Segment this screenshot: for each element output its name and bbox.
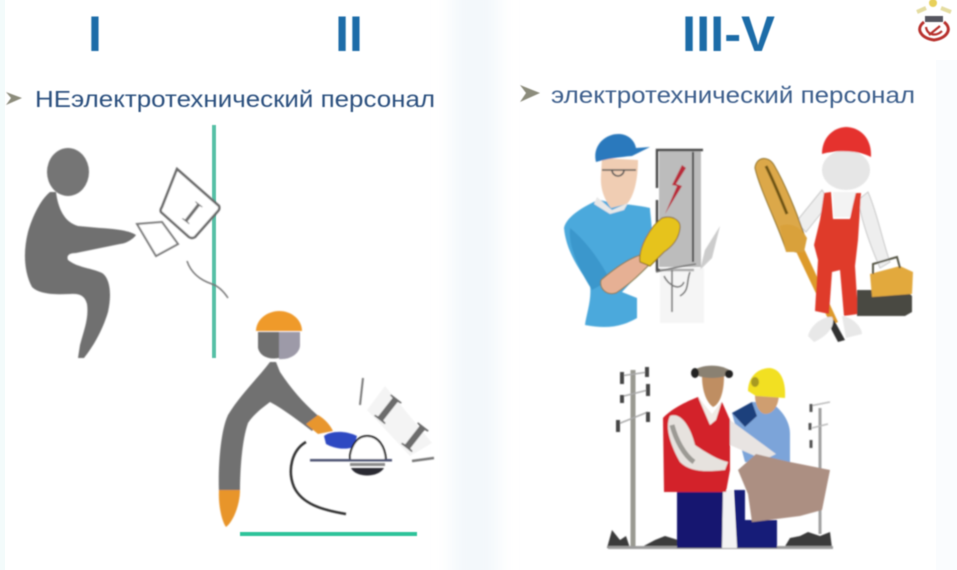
logo <box>917 0 951 40</box>
divider: vertical green line <box>212 125 216 358</box>
screwdriver shaft <box>793 240 838 325</box>
left power pole <box>618 367 648 548</box>
hand <box>780 224 807 252</box>
label: non-electrotechnical staff: НЕэлектротехнический персонал <box>35 86 435 112</box>
figure: seated person with group I card <box>25 148 228 358</box>
screwdriver handle <box>755 159 806 252</box>
body <box>219 362 322 492</box>
right power pole <box>810 402 830 534</box>
label: electrotechnical staff: электротехнический персонал <box>551 82 915 108</box>
heading: I: I <box>88 6 102 62</box>
right arm <box>730 420 776 460</box>
crack line <box>187 261 228 298</box>
heading: III-V: III-V <box>682 6 776 62</box>
cap <box>822 127 871 157</box>
cables <box>660 268 704 323</box>
white shirt arm <box>668 415 728 471</box>
heading: II: II <box>335 6 363 62</box>
figure: seated person with group I card: I <box>176 195 208 231</box>
device <box>350 436 386 460</box>
blueprint <box>738 454 830 522</box>
front worker face <box>702 376 724 407</box>
figure: worker with group II card <box>219 311 435 527</box>
paper card II <box>367 386 432 456</box>
electrical panel <box>659 151 701 267</box>
overalls <box>814 192 861 316</box>
back worker trousers <box>734 490 777 548</box>
illustration: 3D worker with screwdriver and toolbox <box>755 127 913 342</box>
paper sheet <box>137 222 178 256</box>
figure: worker with group II card: I <box>367 387 408 433</box>
back worker body <box>732 402 790 462</box>
toolbox <box>857 290 912 316</box>
shirt <box>833 192 856 217</box>
head <box>822 150 870 190</box>
forearm <box>601 254 652 294</box>
cable <box>291 442 346 514</box>
paper card I <box>161 169 219 238</box>
paper strip <box>722 490 737 548</box>
hand glove <box>324 432 357 449</box>
boot <box>219 490 240 527</box>
front worker trousers <box>677 490 723 548</box>
illustration: electrician at panel <box>564 134 720 327</box>
ground shrubs <box>607 530 832 548</box>
wall shadow <box>700 226 720 270</box>
hat <box>692 366 732 378</box>
illustration: engineers with plan and power poles <box>607 366 833 549</box>
figure: worker with group II card: I <box>394 415 435 461</box>
divider: horizontal green line <box>240 532 417 536</box>
glove <box>640 217 680 266</box>
arm glove <box>306 415 333 434</box>
neck and face <box>601 158 638 208</box>
glasses <box>602 170 636 176</box>
collar <box>698 397 722 425</box>
arms <box>796 190 890 268</box>
torso <box>564 200 652 327</box>
body <box>25 192 136 358</box>
collar <box>594 197 628 214</box>
head <box>47 148 89 196</box>
helmet <box>256 311 302 331</box>
back worker face <box>755 395 779 414</box>
cap <box>595 134 650 162</box>
face <box>258 332 279 359</box>
feet <box>808 316 862 342</box>
red vest <box>663 397 730 492</box>
lightning bolt <box>665 165 686 214</box>
yellow helmet <box>748 368 785 398</box>
